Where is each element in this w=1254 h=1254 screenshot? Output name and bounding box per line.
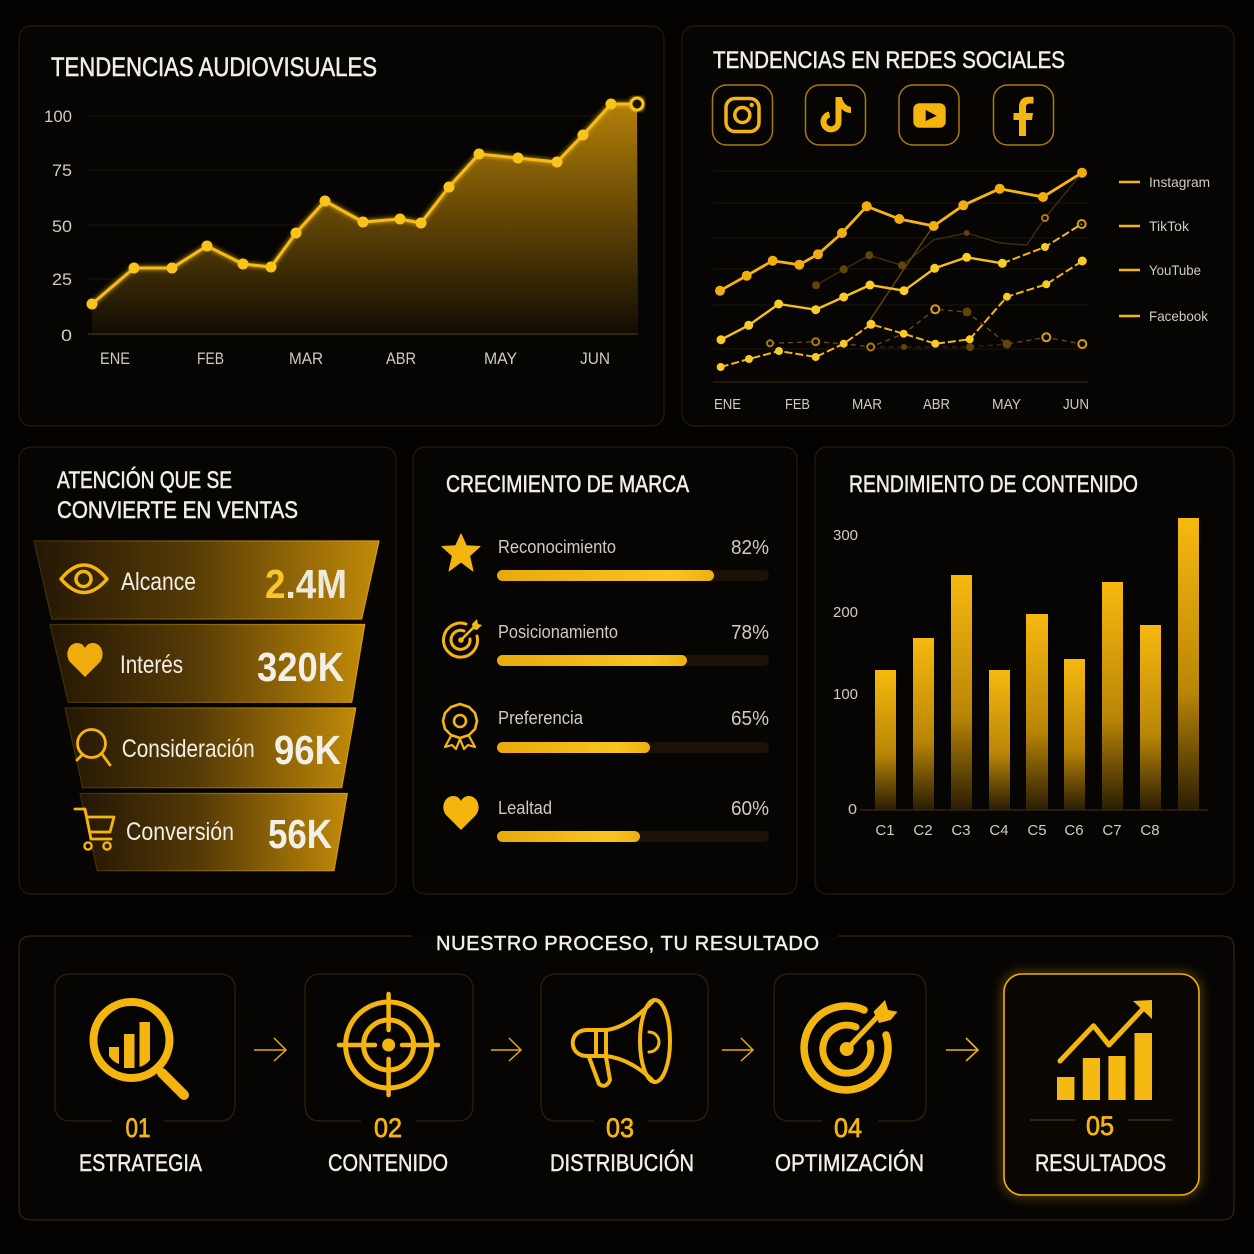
step 03 distribución <box>541 974 708 1177</box>
x axis labels: C5 <box>1027 822 1047 839</box>
heading: crecimiento de marca: CRECIMIENTO DE MARCA <box>446 471 689 498</box>
panel: tendencias audiovisuales <box>19 26 664 426</box>
icon: eye <box>61 565 107 592</box>
metric: preferencia: 65% <box>731 708 769 730</box>
metric: posicionamiento <box>443 619 769 666</box>
x axis labels: FEB <box>785 396 810 413</box>
icon: target <box>443 619 482 657</box>
legend: YouTube <box>1149 262 1201 278</box>
x axis labels <box>875 822 1160 839</box>
icon: tiktok <box>806 85 866 145</box>
icon: crosshair <box>339 994 438 1095</box>
x axis labels: ENE <box>100 349 130 368</box>
x axis labels <box>714 396 1089 413</box>
metric: reconocimiento <box>442 534 769 581</box>
step 01 estrategia: 01 <box>126 1113 150 1143</box>
legend: TikTok <box>1149 218 1190 234</box>
y axis labels: 50 <box>52 217 72 236</box>
metric: preferencia <box>443 704 769 753</box>
x axis labels: MAY <box>992 396 1021 413</box>
arrow <box>254 1038 286 1061</box>
heading: atención que se convierte en ventas: ATENCIÓN QUE SE <box>57 467 232 494</box>
icon: magnifier with chart <box>94 1002 184 1095</box>
metric: posicionamiento: 78% <box>731 622 769 644</box>
step 04 optimización: 04 <box>834 1113 862 1143</box>
metric: lealtad: Lealtad <box>498 798 552 818</box>
icon: heart <box>67 643 103 677</box>
icon: instagram <box>712 85 772 145</box>
step 05 resultados: 05 <box>1086 1111 1114 1141</box>
x axis labels: JUN <box>580 349 610 368</box>
icon: target with arrow <box>804 1000 898 1090</box>
funnel step: conversión: Conversión <box>126 818 234 846</box>
heading: atención que se convierte en ventas <box>57 467 298 524</box>
y axis labels: 200 <box>833 604 858 621</box>
panel: crecimiento de marca <box>413 447 797 894</box>
x axis labels: MAR <box>852 396 882 413</box>
heading: tendencias audiovisuales: TENDENCIAS AUDIOVISUALES <box>51 52 377 82</box>
arrow <box>946 1038 978 1061</box>
icon: facebook <box>994 85 1054 145</box>
x axis labels: C4 <box>989 822 1009 839</box>
metric: lealtad <box>443 796 769 842</box>
icon: star <box>442 534 480 571</box>
funnel step: interés: 320K <box>257 644 344 690</box>
y axis labels: 0 <box>61 326 72 345</box>
funnel step: conversión <box>75 794 347 871</box>
y axis labels <box>833 527 858 818</box>
step 01 estrategia <box>55 974 235 1177</box>
y axis labels: 25 <box>52 270 72 289</box>
arrow <box>491 1038 521 1061</box>
step 04 optimización <box>774 974 926 1177</box>
y axis labels: 75 <box>52 161 72 180</box>
x axis labels: C6 <box>1064 822 1084 839</box>
icon: ribbon <box>443 704 477 749</box>
x axis labels: FEB <box>197 349 224 368</box>
legend <box>1119 174 1210 324</box>
legend: Facebook <box>1149 308 1209 324</box>
metric: lealtad: 60% <box>731 798 769 820</box>
y axis labels: 100 <box>833 686 858 703</box>
step 02 contenido: 02 <box>374 1113 402 1143</box>
heading: nuestro proceso, tu resultado: NUESTRO PROCESO, TU RESULTADO <box>436 933 819 955</box>
panel: rendimiento de contenido <box>815 447 1234 894</box>
metric: reconocimiento: 82% <box>731 537 769 559</box>
panel: atención que se convierte en ventas <box>19 447 396 894</box>
funnel step: interés <box>50 624 365 702</box>
y axis labels <box>44 107 72 345</box>
funnel step: consideración: Consideración <box>122 735 255 763</box>
step 05 resultados <box>1004 974 1199 1195</box>
step 01 estrategia: ESTRATEGIA <box>79 1150 202 1177</box>
icon: heart <box>443 796 479 830</box>
bar chart <box>860 518 1208 810</box>
y axis labels: 100 <box>44 107 72 126</box>
x axis labels: C3 <box>951 822 971 839</box>
step 03 distribución: DISTRIBUCIÓN <box>550 1150 694 1177</box>
step 02 contenido <box>305 974 473 1177</box>
heading: tendencias en redes sociales: TENDENCIAS EN REDES SOCIALES <box>713 47 1065 74</box>
funnel step: consideración <box>65 708 356 788</box>
x axis labels: MAY <box>484 349 517 368</box>
arrow <box>722 1038 753 1061</box>
x axis labels: ENE <box>714 396 741 413</box>
metric: posicionamiento: Posicionamiento <box>498 622 618 642</box>
x axis labels: MAR <box>289 349 323 368</box>
icon: megaphone <box>573 1000 670 1086</box>
step 05 resultados: RESULTADOS <box>1035 1150 1166 1177</box>
legend: Instagram <box>1149 174 1210 190</box>
step 03 distribución: 03 <box>606 1113 634 1143</box>
step 04 optimización: OPTIMIZACIÓN <box>775 1150 924 1177</box>
metric: preferencia: Preferencia <box>498 708 584 728</box>
x axis labels: ABR <box>386 349 416 368</box>
panel: nuestro proceso, tu resultado <box>19 933 1234 1220</box>
heading: atención que se convierte en ventas: CONVIERTE EN VENTAS <box>57 497 298 524</box>
icon: growth chart <box>1057 1000 1152 1100</box>
x axis labels: C7 <box>1102 822 1122 839</box>
area chart <box>86 98 643 334</box>
y axis labels: 300 <box>833 527 858 544</box>
funnel step: interés: Interés <box>120 651 183 679</box>
icon: cart <box>75 809 114 850</box>
x axis labels <box>100 349 610 368</box>
funnel step: conversión: 56K <box>268 811 332 857</box>
icon: youtube <box>899 85 959 145</box>
funnel step: alcance <box>34 541 379 619</box>
funnel step: alcance: 2.4M <box>265 561 347 607</box>
x axis labels: C1 <box>875 822 895 839</box>
funnel step: consideración: 96K <box>274 727 341 773</box>
x axis labels: C8 <box>1140 822 1160 839</box>
funnel step: alcance: Alcance <box>121 568 196 596</box>
metric: reconocimiento: Reconocimiento <box>498 537 616 557</box>
y axis labels: 0 <box>848 801 857 818</box>
x axis labels: C2 <box>913 822 933 839</box>
multi line chart <box>713 168 1088 382</box>
panel: tendencias en redes sociales <box>682 26 1234 426</box>
x axis labels: ABR <box>923 396 950 413</box>
icon: magnifier <box>77 730 110 765</box>
step 02 contenido: CONTENIDO <box>328 1150 448 1177</box>
heading: rendimiento de contenido: RENDIMIENTO DE CONTENIDO <box>849 471 1138 498</box>
x axis labels: JUN <box>1063 396 1089 413</box>
